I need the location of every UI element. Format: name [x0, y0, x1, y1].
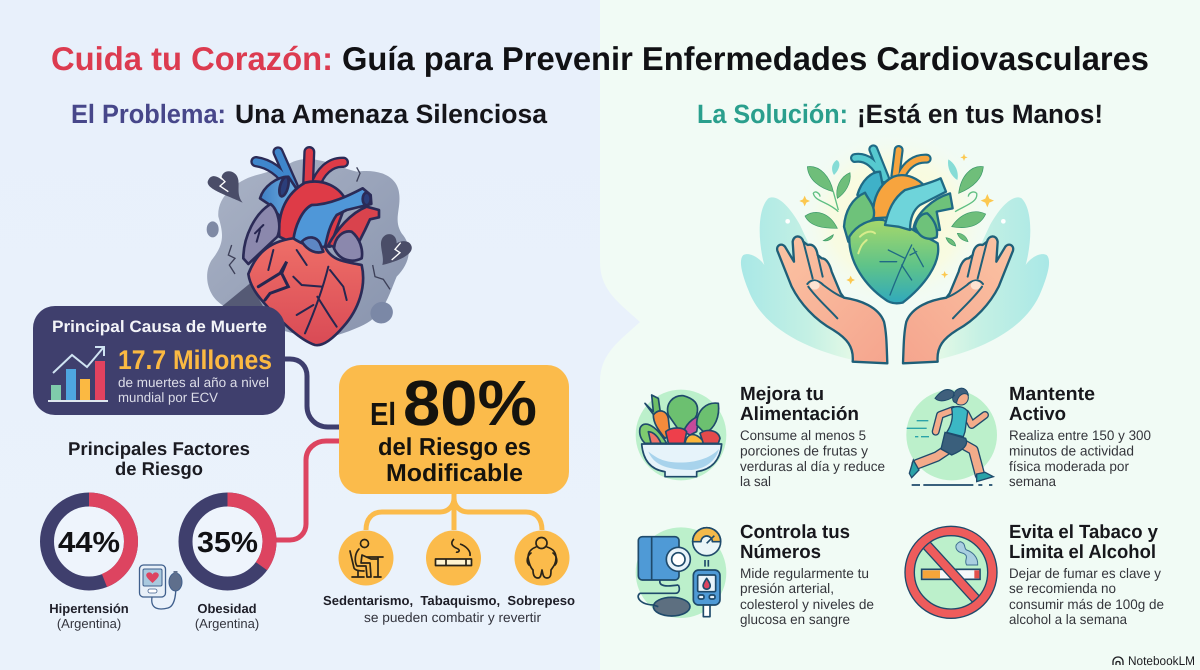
text: mantente activo: semana: [1009, 474, 1056, 489]
text: evita el tabaco y limita el alcohol: Limita el Alcohol: [1009, 542, 1156, 563]
caption: factores modificables: Sedentarismo, Tabaquismo, Sobrepeso: [323, 593, 575, 608]
text: evita el tabaco y limita el alcohol: alcohol a la semana: [1009, 612, 1127, 627]
vessels: [855, 149, 927, 178]
heading: problem: [71, 99, 547, 129]
callout: 80% modificable: del Riesgo es: [378, 434, 531, 461]
text: mejora tu alimentación: Alimentación: [740, 404, 859, 425]
icon: health monitoring devices: [636, 527, 726, 618]
label: hipertensión: (Argentina): [57, 616, 121, 631]
text: evita el tabaco y limita el alcohol: Evita el Tabaco y: [1009, 522, 1158, 543]
donut chart: obesidad 35%: [186, 500, 270, 584]
text: mejora tu alimentación: la sal: [740, 474, 771, 489]
label: hipertensión: [49, 601, 129, 631]
text: mantente activo: Realiza entre 150 y 300: [1009, 428, 1151, 443]
connector: red: [276, 441, 340, 540]
panel heading: Principal Causa de Muerte: [52, 318, 267, 336]
statistic caption: [118, 375, 269, 405]
text: controla tus números: [740, 522, 874, 627]
icon: tabaquismo: [426, 530, 481, 586]
statistic caption: de muertes al año a nivel: [118, 375, 269, 390]
label: hipertensión: Hipertensión: [49, 601, 129, 616]
icon: sobrepeso: [514, 530, 570, 586]
donut chart: obesidad 35%: 35%: [197, 527, 258, 559]
illustration: damaged heart: [207, 152, 412, 345]
vessels: [256, 152, 343, 187]
statistic: 17.7 Millones: [118, 345, 272, 375]
title: Cuida tu Corazón:: [51, 40, 333, 77]
heading: solution: La Solución:: [697, 99, 848, 129]
text: mantente activo: física moderada por: [1009, 459, 1129, 474]
text: mantente activo: [1009, 384, 1151, 489]
text: controla tus números: Controla tus: [740, 522, 850, 543]
text: controla tus números: glucosa en sangre: [740, 612, 850, 627]
callout: 80% modificable: [339, 365, 569, 494]
connector: amber branches: [366, 494, 542, 530]
label: obesidad: Obesidad: [197, 601, 257, 616]
statistic caption: mundial por ECV: [118, 390, 218, 405]
text: mantente activo: Mantente: [1009, 384, 1095, 405]
text: mejora tu alimentación: porciones de frutas y: [740, 444, 868, 458]
icon: runner: [906, 388, 997, 485]
heading: solution: ¡Está en tus Manos!: [857, 99, 1103, 129]
callout: 80% modificable: El: [370, 396, 396, 432]
icon: salad bowl: [636, 390, 726, 480]
callout: 80% modificable: 80%: [403, 367, 537, 439]
text: mejora tu alimentación: [740, 384, 885, 489]
donut chart: hipertensión 44%: 44%: [58, 527, 120, 559]
label: obesidad: [195, 601, 259, 631]
icon: growth chart: [48, 347, 108, 401]
text: mantente activo: minutos de actividad: [1009, 444, 1134, 458]
callout: 80% modificable: Modificable: [386, 460, 523, 487]
heading: factores de riesgo: Principales Factores: [68, 438, 250, 459]
caption: factores modificables: se pueden combatir y revertir: [364, 610, 542, 625]
text: evita el tabaco y limita el alcohol: consumir más de 100g de: [1009, 597, 1164, 612]
text: controla tus números: presión arterial,: [740, 581, 834, 596]
heading: problem: El Problema:: [71, 99, 226, 129]
heading: factores de riesgo: [68, 438, 250, 479]
donut chart: hipertensión 44%: [47, 500, 131, 584]
watermark: NotebookLM: NotebookLM: [1128, 654, 1195, 668]
text: evita el tabaco y limita el alcohol: se recomienda no: [1009, 581, 1116, 596]
text: mejora tu alimentación: verduras al día y reduce: [740, 459, 885, 474]
title: Guía para Prevenir Enfermedades Cardiovasculares: [342, 40, 1149, 77]
illustration: healthy heart in hands: [741, 130, 1049, 363]
text: evita el tabaco y limita el alcohol: Dejar de fumar es clave y: [1009, 566, 1161, 581]
icon: sedentarismo: [338, 530, 394, 586]
heading: factores de riesgo: de Riesgo: [115, 458, 203, 479]
caption: factores modificables: [323, 593, 575, 625]
connector: navy: [285, 359, 340, 427]
text: mejora tu alimentación: Mejora tu: [740, 384, 824, 405]
text: evita el tabaco y limita el alcohol: [1009, 522, 1164, 627]
heading: problem: Una Amenaza Silenciosa: [235, 99, 547, 129]
text: controla tus números: Mide regularmente tu: [740, 566, 869, 581]
text: mejora tu alimentación: Consume al menos 5: [740, 428, 866, 443]
heading: solution: [697, 99, 1103, 129]
text: mantente activo: Activo: [1009, 404, 1066, 425]
icon: no smoking: [909, 531, 993, 614]
text: controla tus números: Números: [740, 542, 821, 563]
text: controla tus números: colesterol y niveles de: [740, 597, 874, 612]
label: obesidad: (Argentina): [195, 616, 259, 631]
panel: principal causa de muerte: [33, 306, 285, 415]
icon: blood pressure monitor: [140, 565, 182, 609]
background: problem side with arrow point: [0, 0, 640, 670]
